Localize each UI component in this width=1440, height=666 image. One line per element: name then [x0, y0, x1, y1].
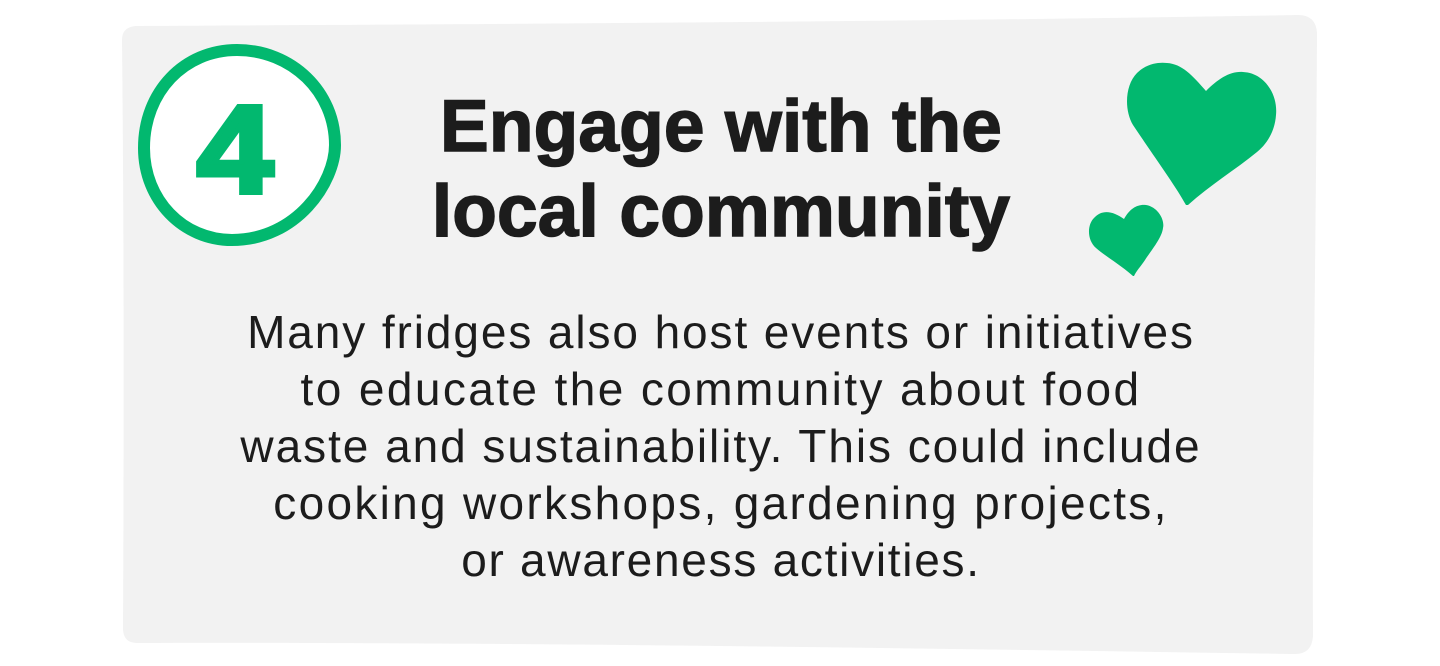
heading [432, 86, 1011, 252]
body text: or awareness activities. [461, 534, 981, 586]
heading: local community [432, 170, 1010, 252]
body text [240, 306, 1202, 586]
body text: waste and sustainability. This could include [240, 420, 1202, 472]
body text: Many fridges also host events or initiatives [247, 306, 1195, 358]
icon: large heart [1127, 62, 1276, 205]
icon: small heart [1088, 204, 1164, 276]
body text: to educate the community about food [301, 363, 1141, 415]
body text: cooking workshops, gardening projects, [273, 477, 1169, 529]
icon: number 4 badge: 4 [197, 79, 273, 219]
icon: number 4 badge [138, 44, 341, 246]
heading: Engage with the [440, 86, 1002, 166]
